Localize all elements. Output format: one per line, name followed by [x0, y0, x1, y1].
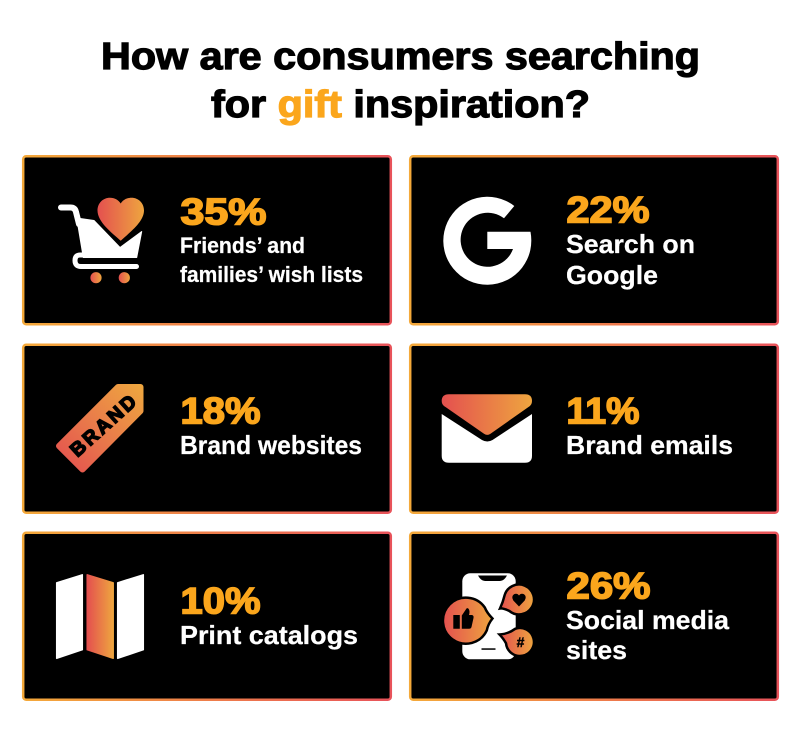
label: friends and families wish lists [180, 233, 363, 287]
panel: print catalogs [23, 533, 391, 700]
label: search on google: Google [566, 260, 658, 290]
icon: brand price tag: BRAND [66, 391, 141, 462]
panel: brand emails [410, 345, 778, 513]
panel: social media sites [410, 533, 778, 700]
icon: envelope [442, 394, 532, 463]
icon: folded map catalog [57, 575, 143, 658]
stat: 35%: 35% [180, 190, 266, 232]
label: social media sites: Social media [566, 605, 730, 635]
panel: brand websites [23, 345, 391, 513]
stat: 11%: 11% [566, 390, 640, 432]
label: search on google: Search on [566, 229, 695, 259]
label: brand websites: Brand websites [180, 430, 362, 460]
stat: 22%: 22% [566, 188, 650, 230]
label: friends and families wish lists: Friends’ and [180, 233, 305, 258]
panel: search on google [410, 156, 778, 324]
icon: phone with social bubbles [443, 573, 534, 659]
stat: 26%: 26% [566, 564, 650, 606]
icon: phone with social bubbles: # [517, 634, 525, 650]
title [101, 36, 700, 126]
stat: 18%: 18% [180, 390, 260, 432]
label: search on google [566, 229, 695, 290]
stat: 10%: 10% [180, 580, 260, 622]
label: social media sites: sites [566, 635, 627, 665]
label: brand emails: Brand emails [566, 430, 733, 460]
icon: google G [443, 197, 531, 285]
label: social media sites [566, 605, 730, 665]
title: How are consumers searching [101, 36, 700, 78]
label: friends and families wish lists: families’ wish lists [180, 262, 363, 287]
icon: shopping cart with heart [61, 198, 144, 283]
label: print catalogs: Print catalogs [180, 620, 358, 650]
panel: friends and families wish lists [23, 156, 391, 324]
title: for gift inspiration? [211, 84, 590, 126]
